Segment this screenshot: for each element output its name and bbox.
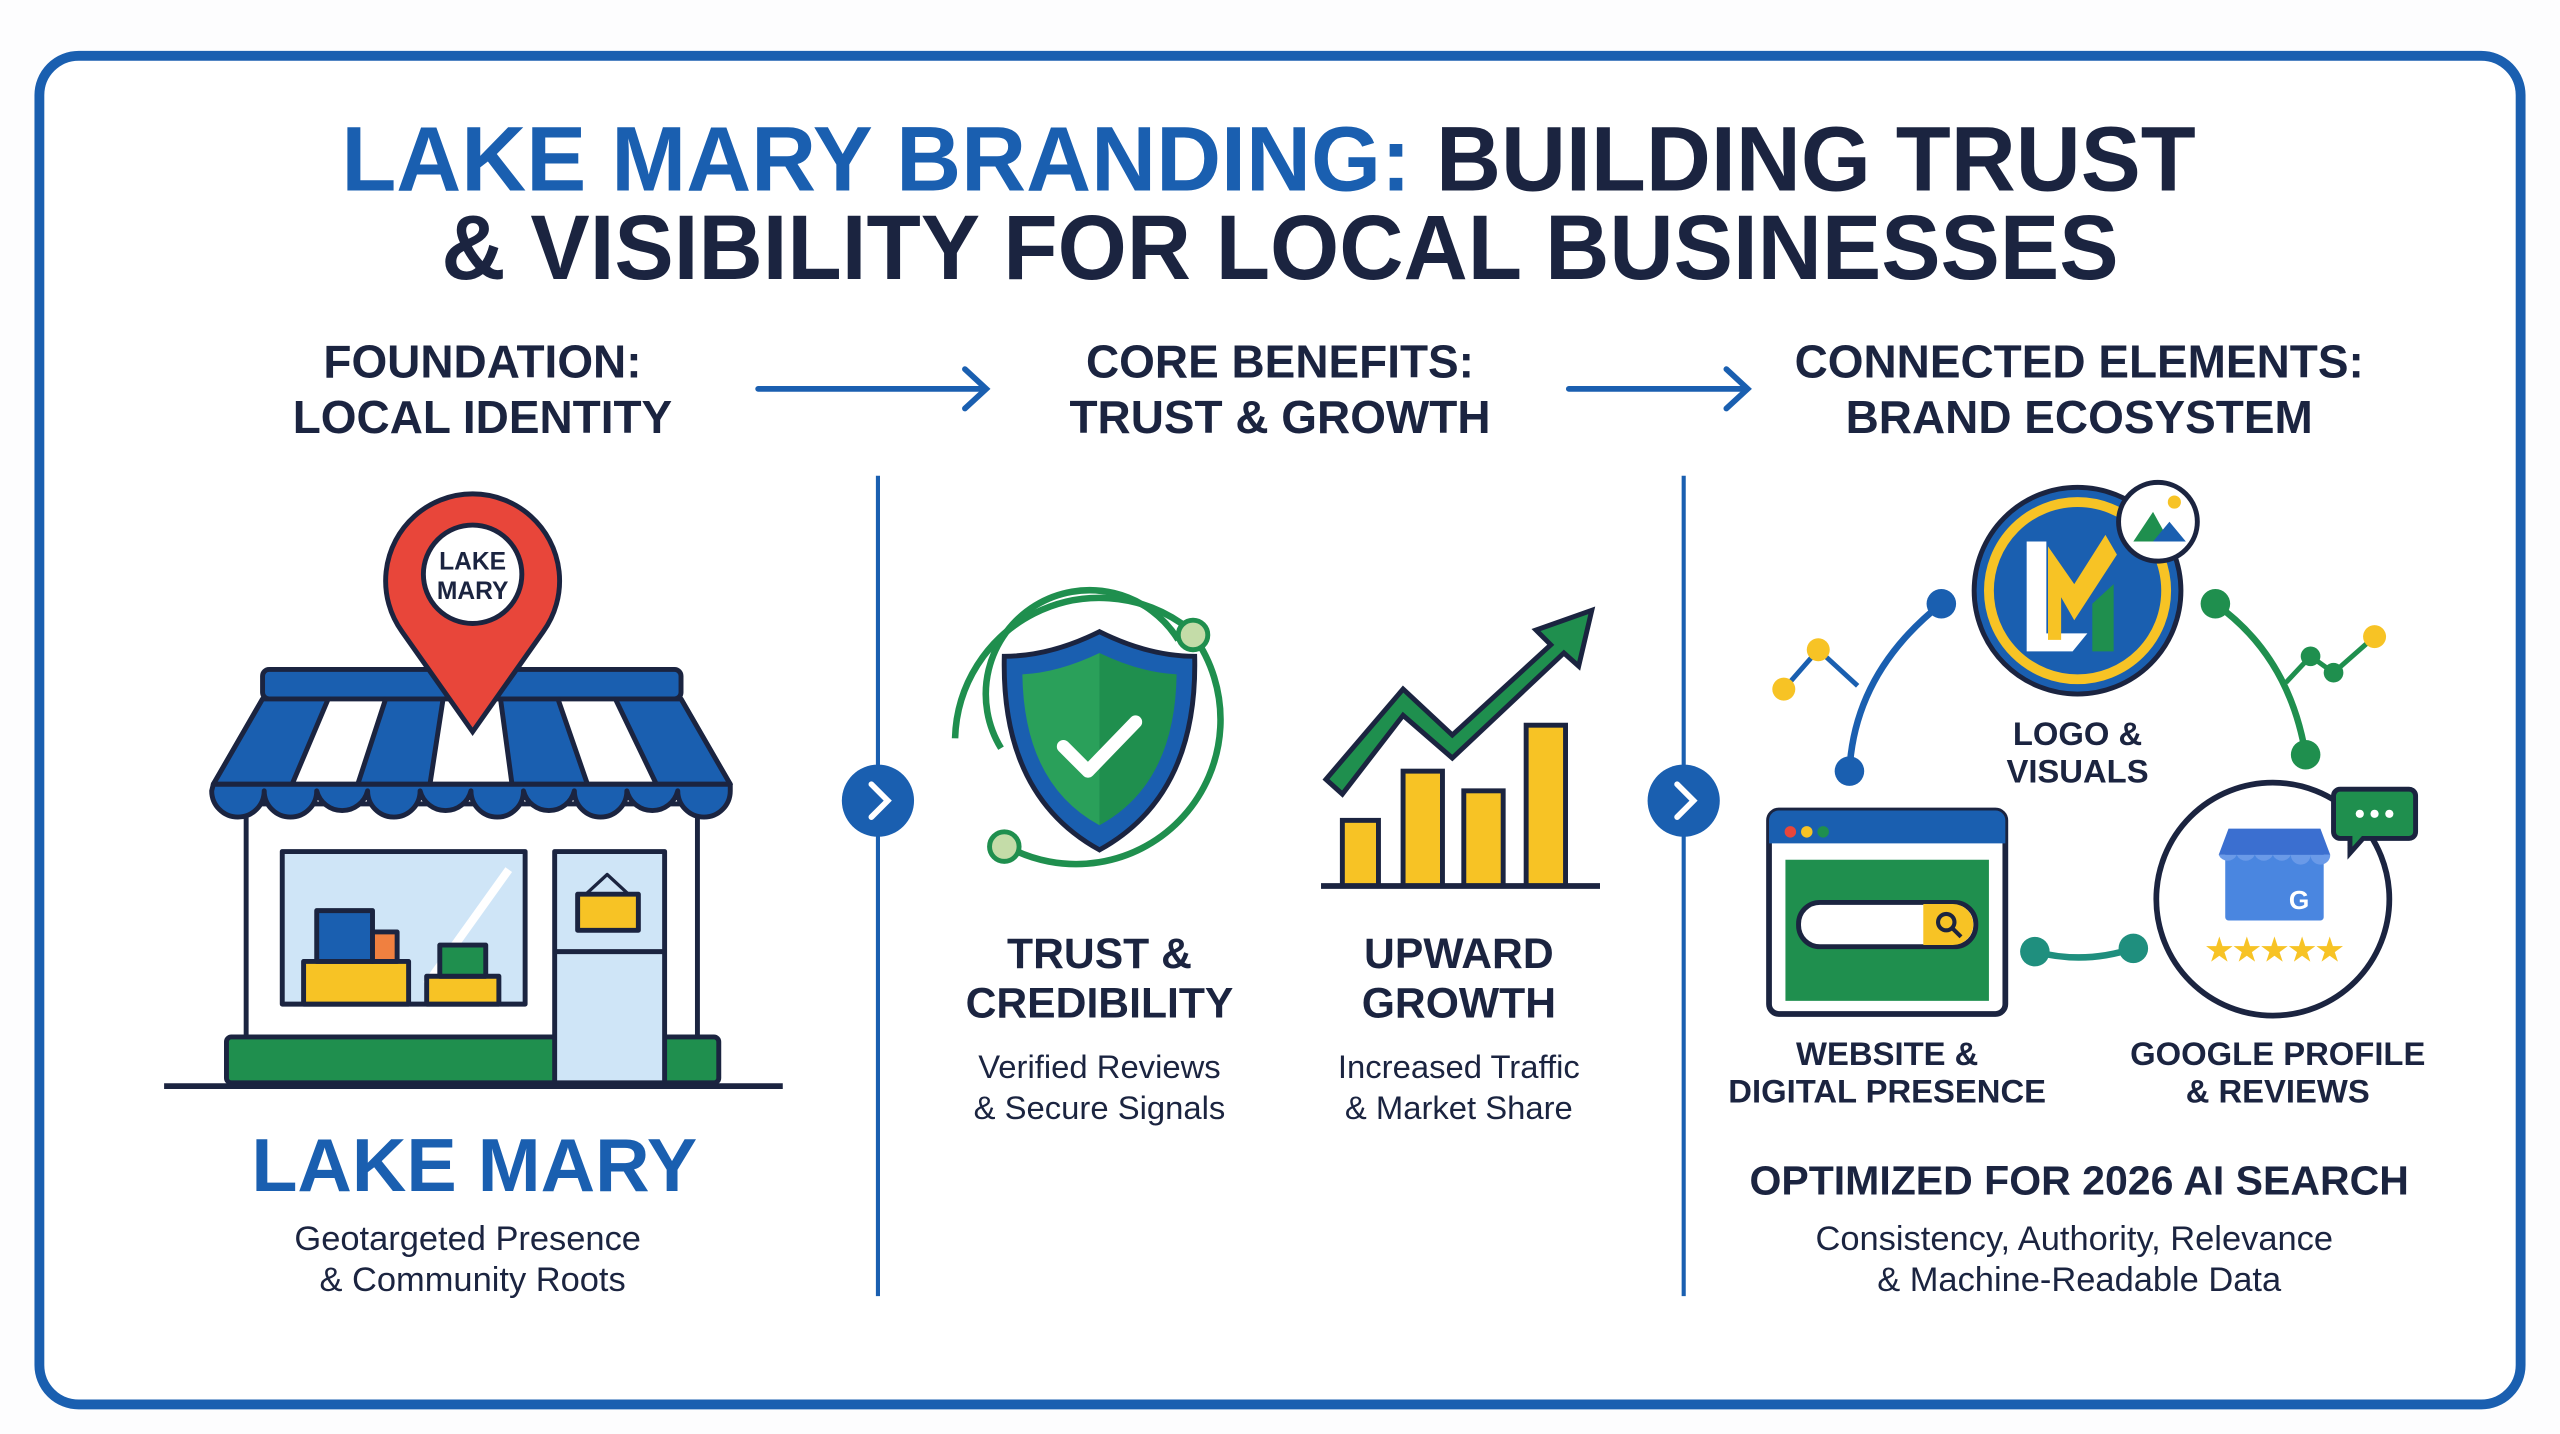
text: growth: GROWTH	[1362, 979, 1556, 1027]
text: optimized: OPTIMIZED FOR 2026 AI SEARCH	[1749, 1157, 2409, 1203]
connector dots	[1772, 589, 2386, 966]
text: growth: & Market Share	[1345, 1089, 1573, 1126]
heading: foundation: FOUNDATION:	[323, 335, 642, 387]
icon: location pin: MARY	[437, 578, 509, 605]
heading: connected elements	[1795, 335, 2364, 443]
icon: location pin	[386, 494, 560, 732]
text: trust: & Secure Signals	[974, 1089, 1225, 1126]
heading: core benefits	[1069, 335, 1491, 443]
icon: location pin: LAKE	[439, 548, 506, 575]
chevron 2	[1648, 765, 1720, 837]
text: optimized: & Machine-Readable Data	[1877, 1261, 2282, 1299]
text: google	[2130, 1035, 2425, 1110]
text: website: DIGITAL PRESENCE	[1728, 1073, 2046, 1110]
text: lake mary	[251, 1123, 697, 1299]
title	[341, 108, 2196, 299]
text: logo: LOGO &	[2013, 715, 2142, 752]
connector lines	[1784, 604, 2375, 957]
text: growth	[1338, 930, 1580, 1126]
text: trust: Verified Reviews	[978, 1048, 1221, 1085]
icon: shield	[955, 590, 1221, 864]
icon: website window	[1769, 811, 2005, 1014]
text: logo: VISUALS	[2006, 753, 2149, 790]
text: optimized	[1749, 1157, 2409, 1299]
heading: connected elements: BRAND ECOSYSTEM	[1846, 391, 2313, 443]
arrow 1	[758, 369, 986, 409]
title: LAKE MARY BRANDING: BUILDING TRUST	[341, 108, 2196, 210]
text: lake mary: Geotargeted Presence	[294, 1220, 641, 1258]
text: google: GOOGLE PROFILE	[2130, 1035, 2425, 1072]
chevron 1	[842, 765, 914, 837]
arrow 2	[1569, 369, 1748, 409]
heading: core benefits: TRUST & GROWTH	[1069, 391, 1491, 443]
text: growth: UPWARD	[1364, 930, 1554, 978]
heading: core benefits: CORE BENEFITS:	[1086, 335, 1474, 387]
title: & VISIBILITY FOR LOCAL BUSINESSES	[441, 197, 2119, 299]
text: trust: CREDIBILITY	[966, 979, 1233, 1027]
icon: storefront	[164, 669, 783, 1086]
text: trust: TRUST &	[1007, 930, 1192, 978]
text: lake mary: LAKE MARY	[251, 1123, 697, 1207]
heading: connected elements: CONNECTED ELEMENTS:	[1795, 335, 2364, 387]
text: trust	[966, 930, 1233, 1126]
icon: logo	[1974, 482, 2197, 694]
icon: google profile	[2156, 783, 2416, 1016]
icon: growth chart	[1321, 610, 1600, 886]
text: lake mary: & Community Roots	[319, 1261, 626, 1299]
icon: google profile: G	[2289, 885, 2309, 915]
heading: foundation: LOCAL IDENTITY	[293, 391, 672, 443]
text: logo	[2006, 715, 2149, 790]
text: growth: Increased Traffic	[1338, 1048, 1580, 1085]
text: optimized: Consistency, Authority, Relevance	[1816, 1220, 2333, 1258]
text: website: WEBSITE &	[1796, 1035, 1978, 1072]
text: website	[1728, 1035, 2046, 1110]
icon: google profile: ★★★★★	[2204, 931, 2343, 969]
text: google: & REVIEWS	[2186, 1073, 2370, 1110]
heading: foundation	[293, 335, 672, 443]
